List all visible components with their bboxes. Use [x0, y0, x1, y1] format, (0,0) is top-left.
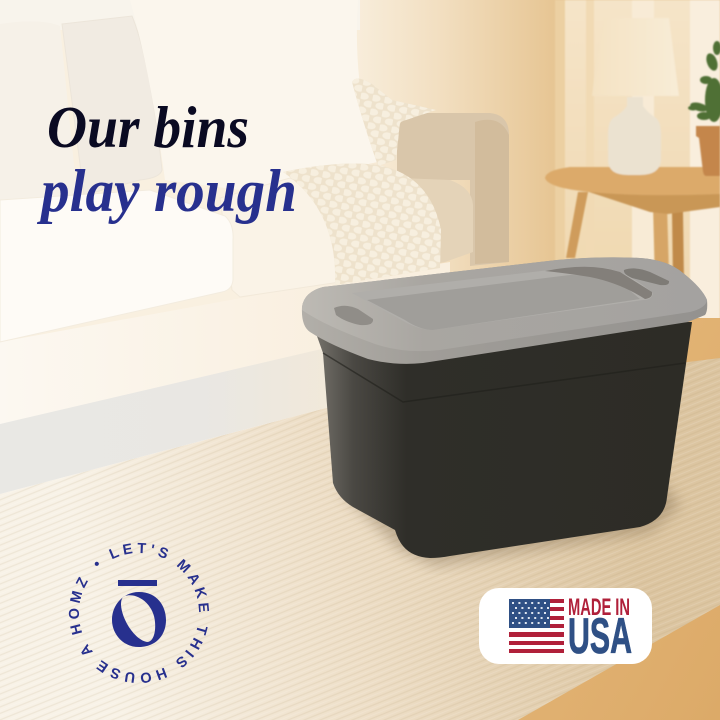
- badge background: [479, 588, 652, 664]
- plant: [688, 41, 720, 122]
- storage bin: [302, 257, 707, 558]
- flag: [509, 599, 564, 653]
- seat cushion 2: [220, 178, 340, 297]
- body rim band: [323, 353, 685, 402]
- rug: [0, 358, 720, 720]
- title line 1: Our bins: [47, 94, 249, 160]
- side table with lamp and plant: [545, 18, 720, 282]
- room background: wall: [0, 0, 720, 420]
- sofa: [0, 0, 509, 494]
- seat beside throw: [400, 178, 473, 270]
- back cushion 1: [0, 21, 77, 205]
- title: [36, 94, 297, 224]
- bin lid skirt: [302, 257, 707, 364]
- wood floor: [500, 318, 720, 720]
- plant pot: [696, 126, 720, 176]
- usa text: USA: [568, 608, 632, 664]
- left handle: [334, 306, 373, 325]
- lid top surface: [302, 257, 707, 351]
- knit throw: [283, 78, 441, 285]
- lid centre panel: [367, 275, 640, 330]
- made in text: MADE IN: [568, 594, 630, 621]
- circular brand logo: [68, 542, 210, 683]
- bin body: [313, 322, 692, 558]
- curtain on right: [555, 0, 720, 330]
- lid recess shadow: [545, 267, 652, 299]
- kick shadow: [0, 347, 330, 494]
- circular slogan text: • LET'S MAKE THIS HOUSE A HOMZ: [68, 542, 210, 683]
- table legs: [566, 192, 588, 258]
- table apron: [583, 190, 720, 214]
- seat cushion 1: [0, 190, 233, 342]
- logo mark: letter o: [112, 592, 166, 647]
- big pillow: [130, 0, 378, 190]
- right handle: [624, 268, 669, 285]
- made in USA badge: [479, 588, 652, 664]
- logo mark: macron: [118, 580, 157, 586]
- sofa arm: [397, 113, 509, 266]
- shadow under bin: [340, 480, 680, 566]
- sofa base: [0, 262, 450, 424]
- top cushion background: [0, 0, 360, 30]
- lamp base: [608, 97, 661, 175]
- lid recess rim: [352, 267, 653, 330]
- table top: [545, 167, 720, 195]
- lamp shade: [592, 18, 679, 96]
- title line 2: play rough: [36, 158, 297, 224]
- back cushion 2: [62, 16, 162, 195]
